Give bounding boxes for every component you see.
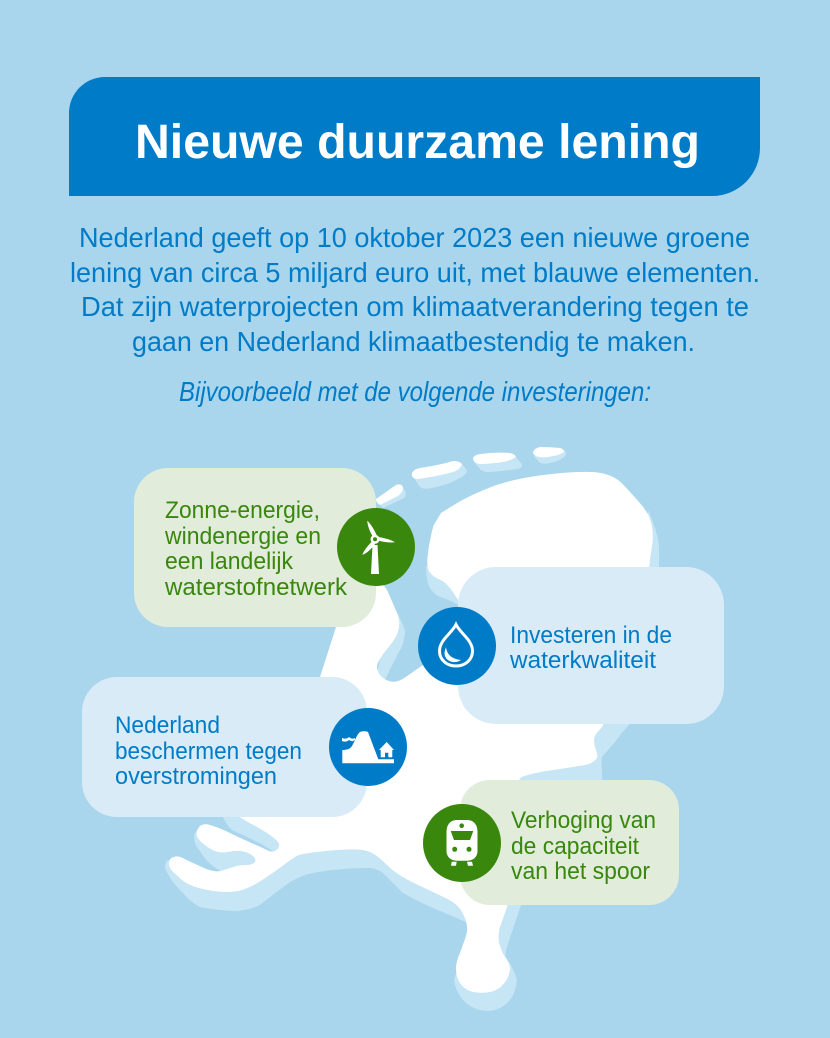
icon: dike and house: [329, 708, 407, 786]
intro text: gaan en Nederland klimaatbestendig te maken.: [132, 326, 695, 357]
intro text: [70, 222, 760, 357]
panel: rail capacity: de capaciteit: [511, 833, 639, 860]
panel: flood protection: Nederland: [115, 712, 220, 739]
panel: flood protection: [82, 677, 367, 817]
panel: renewable energy: waterstofnetwerk: [164, 574, 348, 601]
icon: water drop: [418, 607, 496, 685]
panel: flood protection: overstromingen: [115, 763, 277, 790]
panel: rail capacity: van het spoor: [511, 858, 650, 885]
panel: renewable energy: [134, 468, 376, 627]
panel: water quality: Investeren in de: [510, 622, 672, 649]
panel: water quality: waterkwaliteit: [509, 647, 656, 674]
panel: renewable energy: een landelijk: [165, 548, 294, 575]
title banner: Nieuwe duurzame lening: [135, 116, 700, 169]
panel: rail capacity: Verhoging van: [511, 807, 656, 834]
intro text: Dat zijn waterprojecten om klimaatverandering tegen te: [81, 291, 749, 322]
panel: renewable energy: Zonne-energie,: [165, 497, 320, 524]
map of the Netherlands: [165, 447, 659, 1011]
subheading: Bijvoorbeeld met de volgende investeringen:: [179, 376, 651, 407]
intro text: Nederland geeft op 10 oktober 2023 een nieuwe groene: [79, 222, 750, 253]
panel: rail capacity: [460, 780, 679, 905]
icon: wind turbine: [337, 508, 415, 586]
panel: renewable energy: windenergie en: [164, 523, 321, 550]
map shadow: [165, 450, 659, 1011]
icon: train: [423, 804, 501, 882]
panel: water quality: [458, 567, 724, 724]
map land: [169, 447, 653, 993]
title banner: [69, 77, 760, 196]
panel: flood protection: beschermen tegen: [115, 738, 302, 765]
intro text: lening van circa 5 miljard euro uit, met blauwe elementen.: [70, 257, 760, 288]
